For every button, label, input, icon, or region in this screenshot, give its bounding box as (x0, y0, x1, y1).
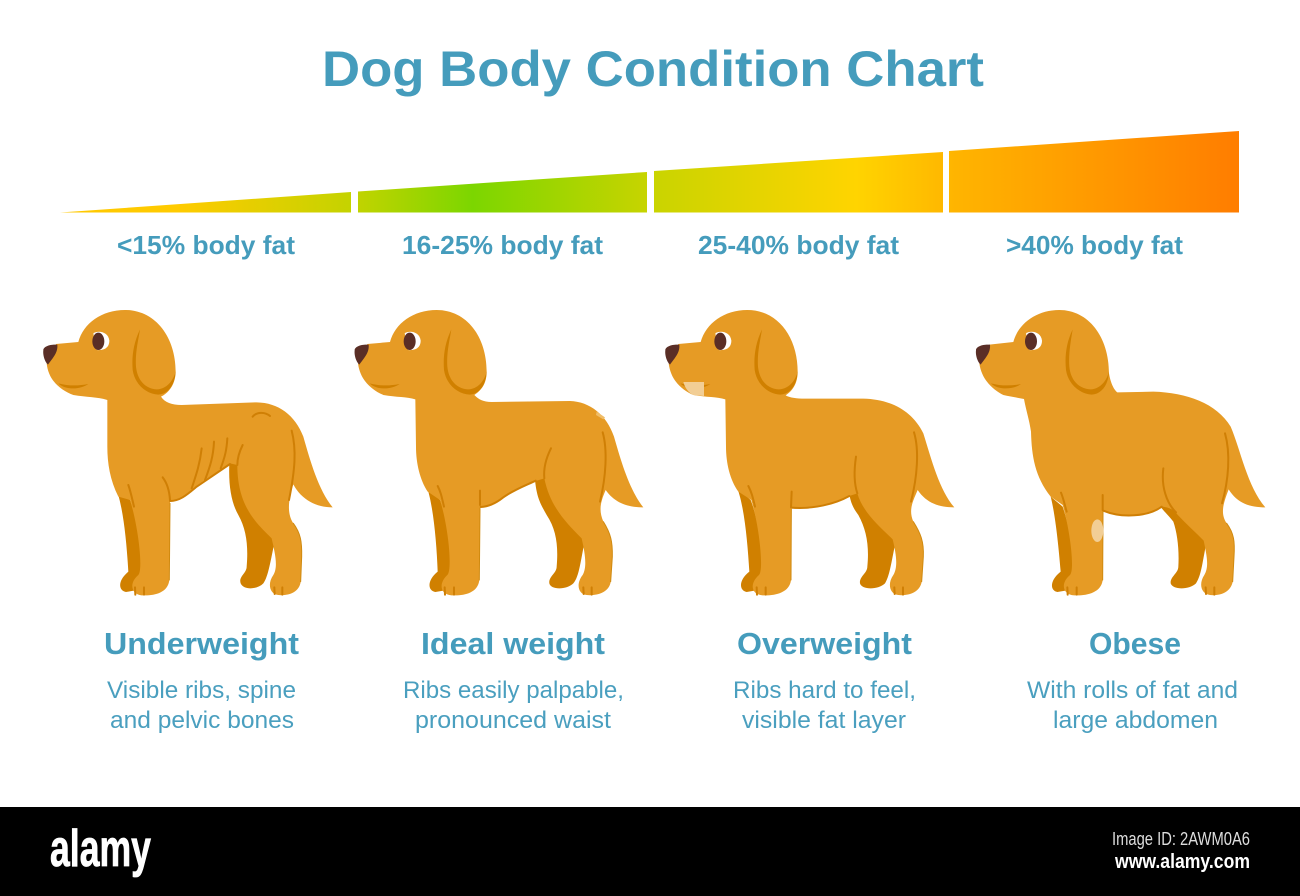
body fat labels (117, 230, 1183, 260)
condition descriptions: pronounced waist (415, 707, 611, 734)
condition names: Underweight (104, 626, 299, 661)
footer bar (0, 807, 1300, 896)
logo text: alamy (50, 820, 151, 878)
body fat labels: <15% body fat (117, 230, 295, 260)
condition descriptions: Visible ribs, spine (107, 677, 296, 704)
image id: Image ID: 2AWM0A6 (1112, 829, 1250, 849)
title: Dog Body Condition Chart (322, 41, 984, 97)
condition names: Obese (1089, 626, 1181, 661)
condition descriptions (107, 677, 1238, 734)
condition names: Ideal weight (421, 626, 605, 661)
body fat labels: 16-25% body fat (402, 230, 603, 260)
body fat labels: 25-40% body fat (698, 230, 899, 260)
condition descriptions: Ribs easily palpable, (403, 677, 624, 704)
condition names (104, 626, 1181, 661)
body fat gradient scale (60, 131, 1239, 212)
condition descriptions: With rolls of fat and (1027, 677, 1238, 704)
condition descriptions: and pelvic bones (110, 707, 294, 734)
condition names: Overweight (737, 626, 912, 661)
condition descriptions: large abdomen (1053, 707, 1218, 734)
condition descriptions: Ribs hard to feel, (733, 677, 916, 704)
dog: underweight (43, 310, 333, 595)
dog: ideal weight (355, 310, 643, 595)
condition descriptions: visible fat layer (742, 707, 906, 734)
body fat labels: >40% body fat (1006, 230, 1183, 260)
dog: obese (976, 310, 1265, 595)
website: www.alamy.com (1114, 851, 1250, 873)
dog: overweight (665, 310, 954, 595)
